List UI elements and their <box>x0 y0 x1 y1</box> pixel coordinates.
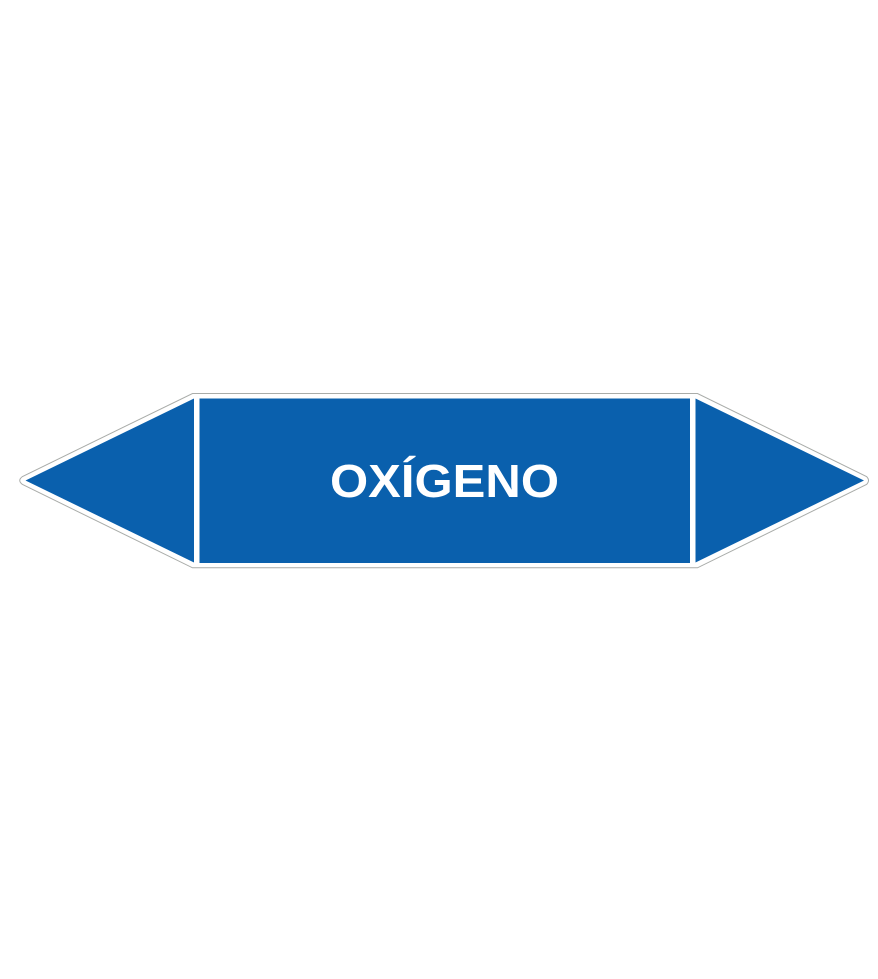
right arrow head <box>696 398 864 562</box>
center band <box>200 398 690 563</box>
pipe marker sign <box>20 394 868 568</box>
left arrow head <box>26 398 194 562</box>
sign outline <box>20 394 868 568</box>
label: OXÍGENO: OXÍGENO <box>330 455 559 507</box>
